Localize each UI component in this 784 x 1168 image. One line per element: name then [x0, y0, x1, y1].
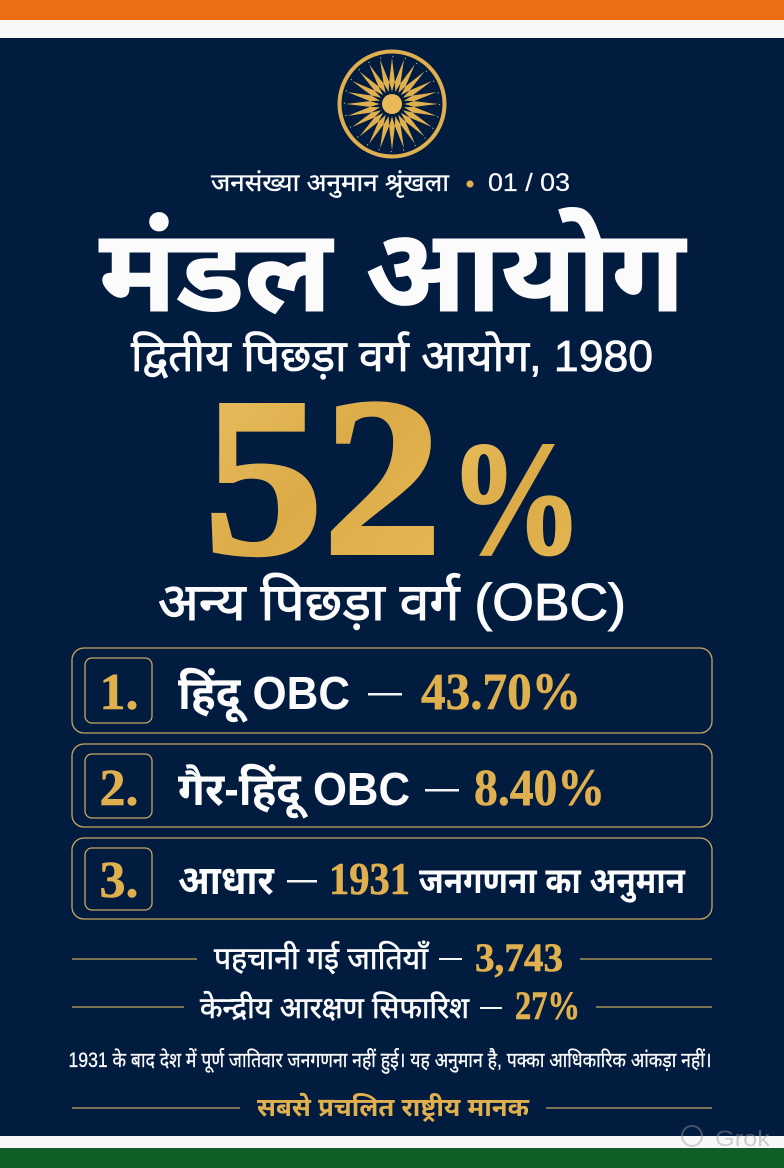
panel: row 1: 43.70%	[421, 664, 581, 721]
series label: 01 / 03	[488, 169, 570, 197]
panel: row 1: हिंदू OBC	[178, 667, 350, 723]
panel: row 2	[72, 744, 712, 827]
title: मंडल आयोग	[99, 206, 687, 336]
footer tagline: सबसे प्रचलित राष्ट्रीय मानक	[257, 1092, 529, 1122]
fact: castes identified	[72, 935, 712, 980]
big stat: 52%	[204, 352, 583, 602]
panel: row 3: आधार	[178, 859, 275, 903]
watermark: Grok	[715, 1126, 771, 1151]
panel: row 3: 3.	[100, 852, 138, 909]
fact: central reservation: 27%	[515, 983, 580, 1028]
fact: castes identified: 3,743	[475, 935, 563, 980]
series label: जनसंख्या अनुमान श्रृंखला	[211, 169, 450, 198]
fact: castes identified: पहचानी गई जातियाँ	[214, 941, 430, 976]
panel: row 1	[72, 648, 712, 733]
panel: row 3: जनगणना का अनुमान	[419, 860, 686, 903]
watermark	[682, 1126, 771, 1151]
subtitle: द्वितीय पिछड़ा वर्ग आयोग, 1980	[131, 331, 653, 381]
stat label: अन्य पिछड़ा वर्ग (OBC)	[158, 573, 626, 632]
number badge 1	[85, 658, 152, 723]
big stat: 52%: %	[449, 410, 583, 589]
panel: row 2: गैर-हिंदू OBC	[178, 763, 410, 819]
fact: central reservation	[72, 983, 712, 1028]
panel: row 3: 1931	[329, 853, 410, 904]
panel: row 2: 8.40%	[474, 760, 605, 817]
number badge 3	[85, 848, 152, 910]
big stat: 52%: 52	[204, 352, 442, 602]
panel: row 2: 2.	[100, 760, 138, 817]
icon: Ashoka chakra	[340, 52, 444, 156]
panel: row 3	[72, 838, 712, 919]
top tricolor band	[0, 0, 784, 38]
fact: central reservation: केन्द्रीय आरक्षण सिफारिश	[200, 990, 470, 1025]
series label	[211, 169, 570, 198]
panel: row 1: 1.	[100, 664, 138, 721]
number badge 2	[85, 754, 152, 818]
bottom tricolor band	[0, 1136, 784, 1168]
